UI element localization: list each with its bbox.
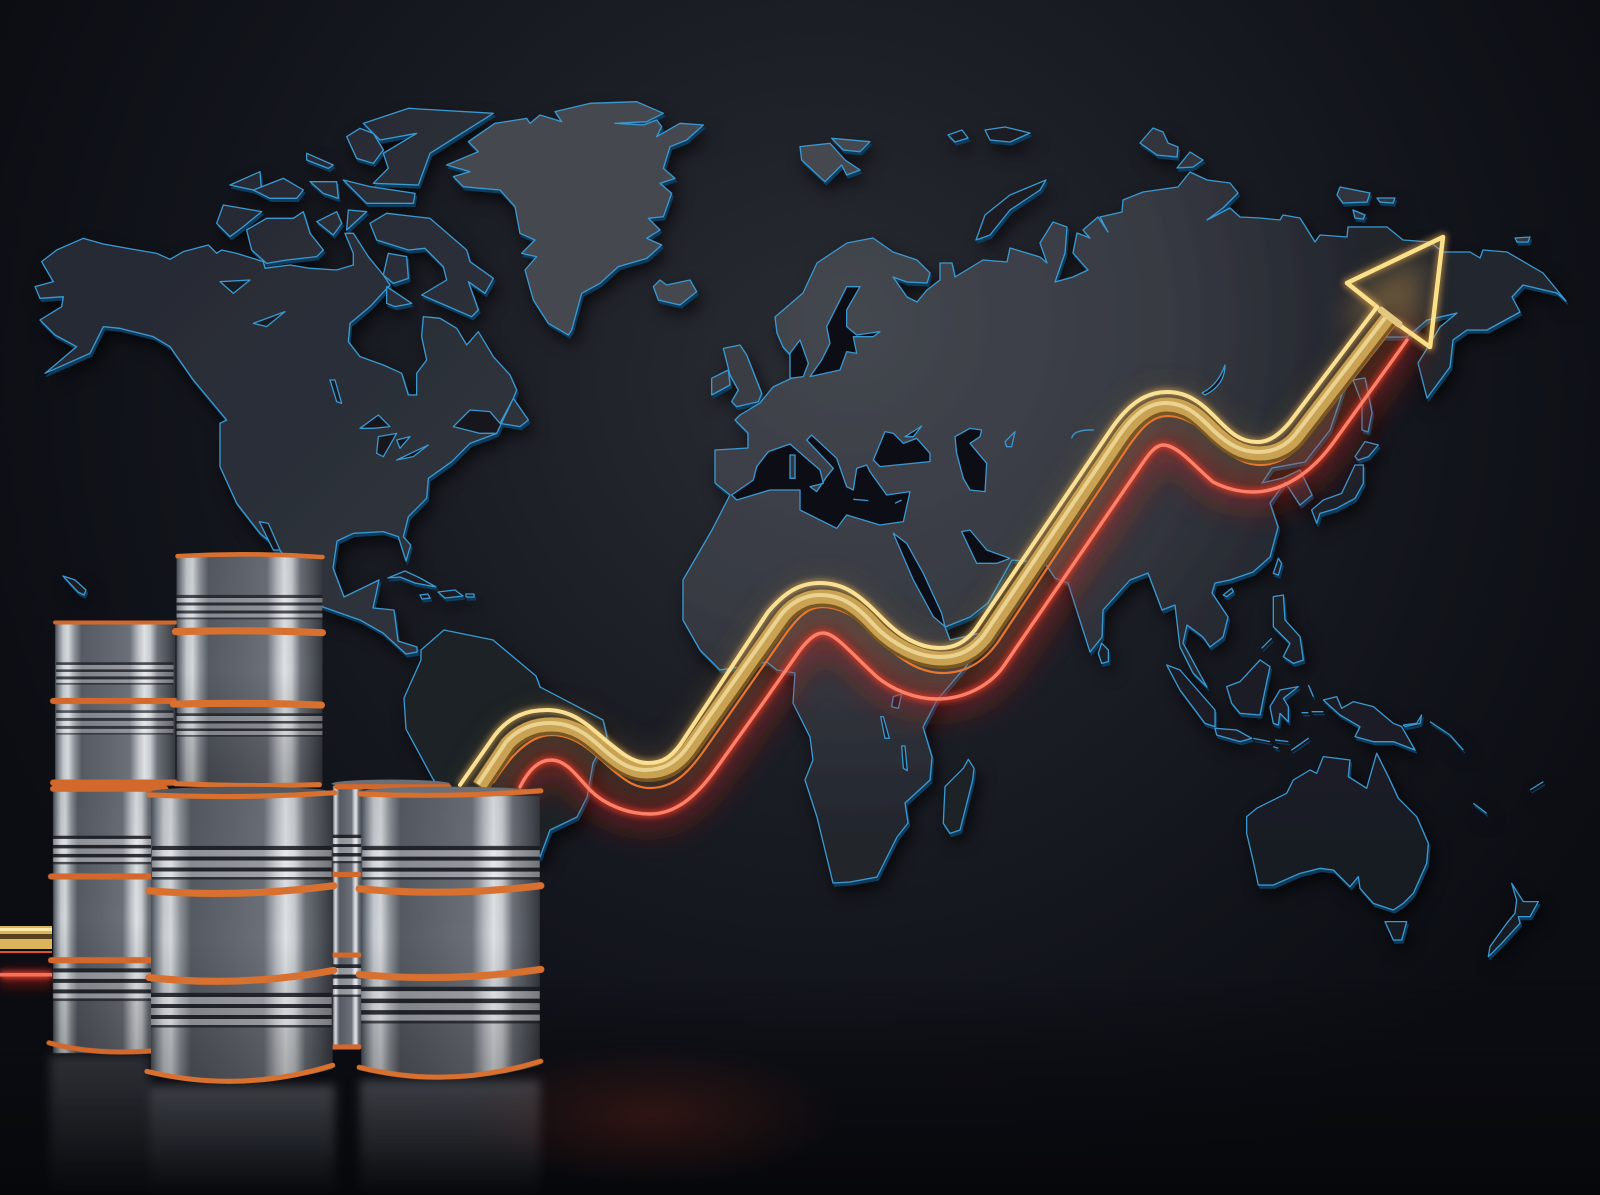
gold tube highlight: [478, 314, 1388, 784]
lakes of Africa: [881, 694, 974, 833]
Great Slave Lake: [253, 312, 285, 327]
Australia: [1247, 753, 1428, 910]
New Siberian Islands: [1337, 187, 1370, 203]
Greenland: [447, 102, 703, 335]
Red Sea: [893, 533, 945, 627]
left pipe segment: [0, 926, 52, 988]
continent: Europe, Asia and Africa: [683, 172, 1566, 883]
Caribbean and Pacific islands: [63, 571, 474, 599]
Honshu and Kyushu: [1312, 465, 1363, 523]
floor shadow: [0, 980, 1600, 1195]
Puerto Rico: [466, 594, 474, 597]
Sulawesi: [1270, 687, 1298, 725]
barrel: top stacked: [173, 554, 322, 786]
New Siberian Islands east: [1377, 198, 1395, 203]
Greenland, Iceland and Svalbard: [447, 102, 870, 335]
New Guinea: [1323, 697, 1415, 750]
Arctic Russia islands: [948, 127, 1530, 242]
soft arrow-head light smear: [1340, 255, 1425, 330]
Severnaya Zemlya west: [1140, 128, 1178, 157]
Bathurst Island: [253, 178, 303, 198]
Caspian Sea: [955, 428, 987, 492]
Severnaya Zemlya east: [1177, 152, 1203, 168]
barrel: front right: [359, 787, 541, 1078]
Baja California gulf: [259, 522, 280, 550]
Lake Baikal: [1202, 365, 1225, 395]
Great Bear Lake: [220, 280, 250, 293]
Philippines: [1273, 595, 1303, 663]
orange underline: [493, 322, 1397, 788]
Madagascar: [943, 759, 974, 833]
Wrangel Island: [1515, 237, 1530, 242]
Ellesmere Island: [363, 108, 493, 185]
Great Britain: [723, 345, 762, 407]
Java: [1215, 728, 1252, 742]
gold tube body: [480, 316, 1390, 786]
Svalbard: [800, 143, 860, 182]
gold tube: [480, 317, 1390, 787]
Britain and Ireland: [712, 345, 762, 407]
New Zealand: [1488, 883, 1538, 957]
Jamaica: [420, 594, 430, 599]
seas and lakes of Europe and the Middle East: [732, 287, 1094, 627]
Asia Pacific islands: [1098, 442, 1543, 957]
yellow neon line glow: [460, 307, 1377, 785]
world map: [35, 102, 1566, 957]
Lake Huron: [397, 437, 410, 448]
Lake Tanganyika: [881, 717, 889, 738]
Lake Malawi: [902, 746, 907, 771]
Skagerrak: [790, 340, 808, 378]
Novaya Zemlya: [976, 180, 1046, 240]
Sicily and Crete: [790, 455, 902, 503]
Victoria Island: [247, 212, 323, 263]
barrel: front left: [147, 787, 335, 1081]
Lake Victoria: [892, 694, 902, 708]
Franz Josef Land: [948, 130, 968, 142]
Franz Josef Land east: [985, 127, 1030, 142]
mainland: [35, 233, 528, 654]
Tasmania: [1385, 922, 1407, 940]
Ellef Ringnes Island: [307, 153, 333, 168]
Lesser Sunda Islands: [1253, 638, 1543, 813]
Taiwan: [1273, 558, 1282, 575]
Somerset Island: [347, 210, 367, 230]
Hainan: [1223, 588, 1233, 597]
Devon Island: [343, 180, 415, 203]
Lake Superior: [360, 415, 390, 428]
neon arrow head: [1347, 237, 1443, 347]
tube end cap: [1381, 310, 1399, 324]
gold pipeline: [460, 307, 1397, 788]
Ireland: [712, 370, 730, 395]
Axel Heiberg Island: [347, 128, 383, 163]
Hokkaido: [1355, 442, 1378, 460]
Prince of Wales Island: [317, 212, 342, 235]
Black Sea: [873, 432, 930, 467]
Baltic Sea: [810, 287, 880, 377]
Hispaniola: [438, 590, 463, 598]
Nordaustlandet: [832, 138, 870, 152]
Sumatra: [1167, 665, 1215, 727]
Persian Gulf: [962, 530, 1010, 563]
Iceland: [653, 280, 697, 305]
Melville Island: [230, 172, 262, 193]
pipe glow: [480, 317, 1407, 814]
barrel: back left: [49, 622, 176, 1053]
red neon line: [520, 340, 1407, 814]
Banks Island: [217, 205, 262, 237]
Cuba: [388, 571, 436, 587]
floor reflections: [50, 1055, 540, 1195]
Aral Sea: [1005, 432, 1015, 447]
Southampton Island: [387, 287, 412, 307]
Sea of Azov: [905, 426, 922, 437]
Lake Winnipeg: [330, 380, 342, 403]
Sakhalin: [1353, 378, 1372, 432]
Borneo: [1227, 660, 1270, 715]
Hawaiian Islands: [63, 576, 86, 595]
Lake Michigan: [377, 433, 397, 457]
Cornwall Island: [310, 182, 338, 198]
Lake Balkhash: [1072, 430, 1094, 438]
red floor reflection: [460, 1045, 840, 1185]
New Britain: [1403, 715, 1422, 727]
Sri Lanka: [1098, 643, 1108, 663]
Lyakhovsky Islands: [1353, 210, 1365, 219]
yellow neon line: [460, 307, 1377, 785]
South America: [404, 630, 607, 870]
North America: [35, 108, 528, 654]
Lakes Erie and Ontario: [397, 445, 428, 460]
Melville Peninsula: [383, 253, 408, 283]
barrel: back middle: [332, 780, 450, 1047]
Mediterranean Sea: [732, 435, 910, 528]
Gulf of St Lawrence: [453, 398, 513, 433]
Baffin Island: [370, 213, 493, 317]
